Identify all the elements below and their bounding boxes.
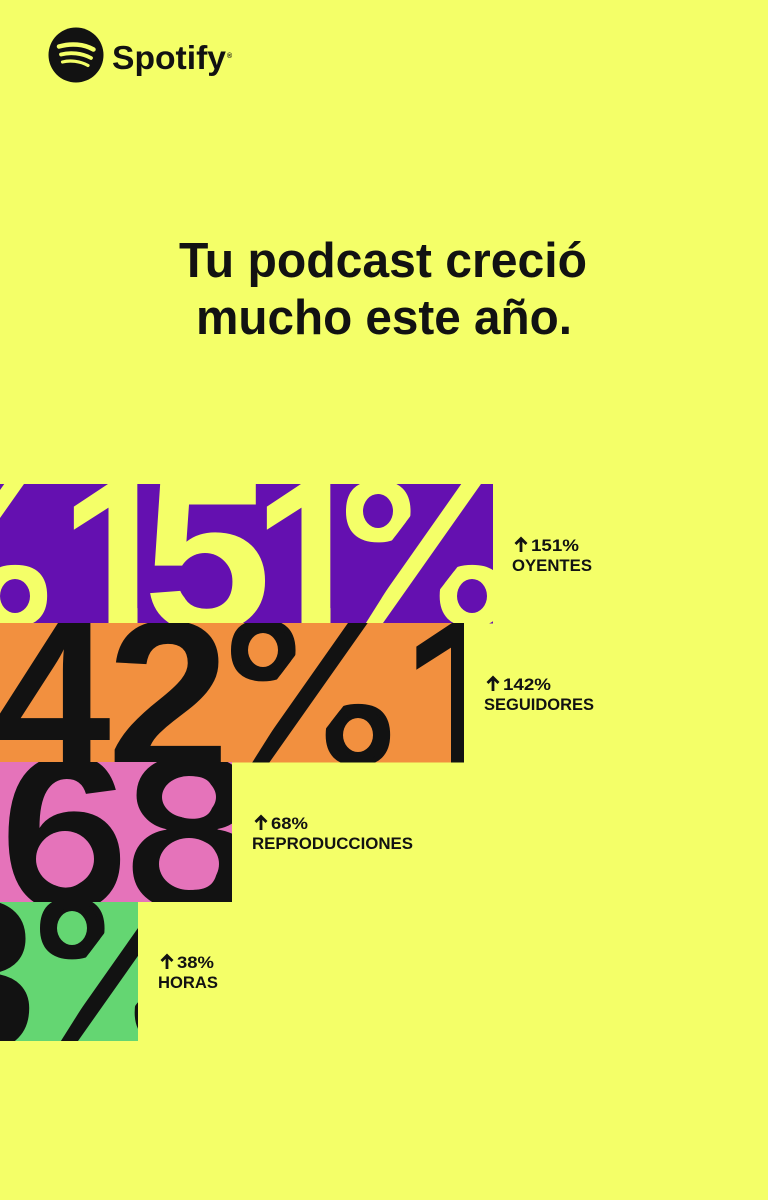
label: 68% reproducciones: 68% <box>271 814 308 833</box>
title: mucho este año. <box>196 291 572 345</box>
icon: up arrow <box>488 678 498 691</box>
bar: seguidores 142%: % <box>230 595 379 740</box>
registered mark: ® <box>227 52 233 60</box>
bar: oyentes 151%: 5 <box>143 437 271 676</box>
label: 142% seguidores: SEGUIDORES <box>484 695 594 714</box>
bar: oyentes 151%: % <box>356 506 505 651</box>
bar: reproducciones 68% <box>0 762 232 902</box>
bar: horas 38%: % <box>16 855 215 1094</box>
bar: reproducciones 68%: 6 <box>0 710 128 956</box>
bar: seguidores 142%: 1 <box>402 576 519 815</box>
label: 142% seguidores <box>484 675 594 714</box>
icon: up arrow <box>516 538 526 552</box>
bar: oyentes 151%: 1 <box>252 436 369 675</box>
bar: horas 38%: % <box>51 922 200 1068</box>
bar: oyentes 151% <box>0 484 493 624</box>
label: 68% reproducciones: REPRODUCCIONES <box>252 834 413 853</box>
label: 151% oyentes: OYENTES <box>512 556 592 575</box>
label: 38% horas: HORAS <box>158 973 218 992</box>
logo: Spotify <box>48 28 233 82</box>
icon: up arrow <box>256 816 266 830</box>
bar: horas 38%: % <box>39 873 188 1018</box>
wordmark: Spotify <box>112 39 227 76</box>
bar: oyentes 151%: % <box>321 437 520 676</box>
title: Tu podcast creció <box>179 234 587 288</box>
label: 142% seguidores: 142% <box>503 675 551 694</box>
bar: seguidores 142%: 2 <box>107 577 230 816</box>
label: 151% oyentes <box>512 536 592 575</box>
label: 38% horas <box>158 953 218 992</box>
label: 38% horas: 38% <box>177 953 214 972</box>
icon: up arrow <box>162 956 172 969</box>
label: 151% oyentes: 151% <box>531 536 579 555</box>
bar: horas 38% <box>0 902 138 1041</box>
bar: seguidores 142% <box>0 623 464 762</box>
bar: oyentes 151%: 1 <box>60 436 176 675</box>
bar: seguidores 142%: % <box>207 577 406 816</box>
title <box>179 234 587 345</box>
label: 68% reproducciones <box>252 814 413 853</box>
bar: oyentes 151%: % <box>345 456 494 601</box>
bar: seguidores 142%: % <box>242 645 391 790</box>
bar: reproducciones 68%: 8 <box>125 711 259 957</box>
icon: Spotify circle <box>48 28 104 82</box>
